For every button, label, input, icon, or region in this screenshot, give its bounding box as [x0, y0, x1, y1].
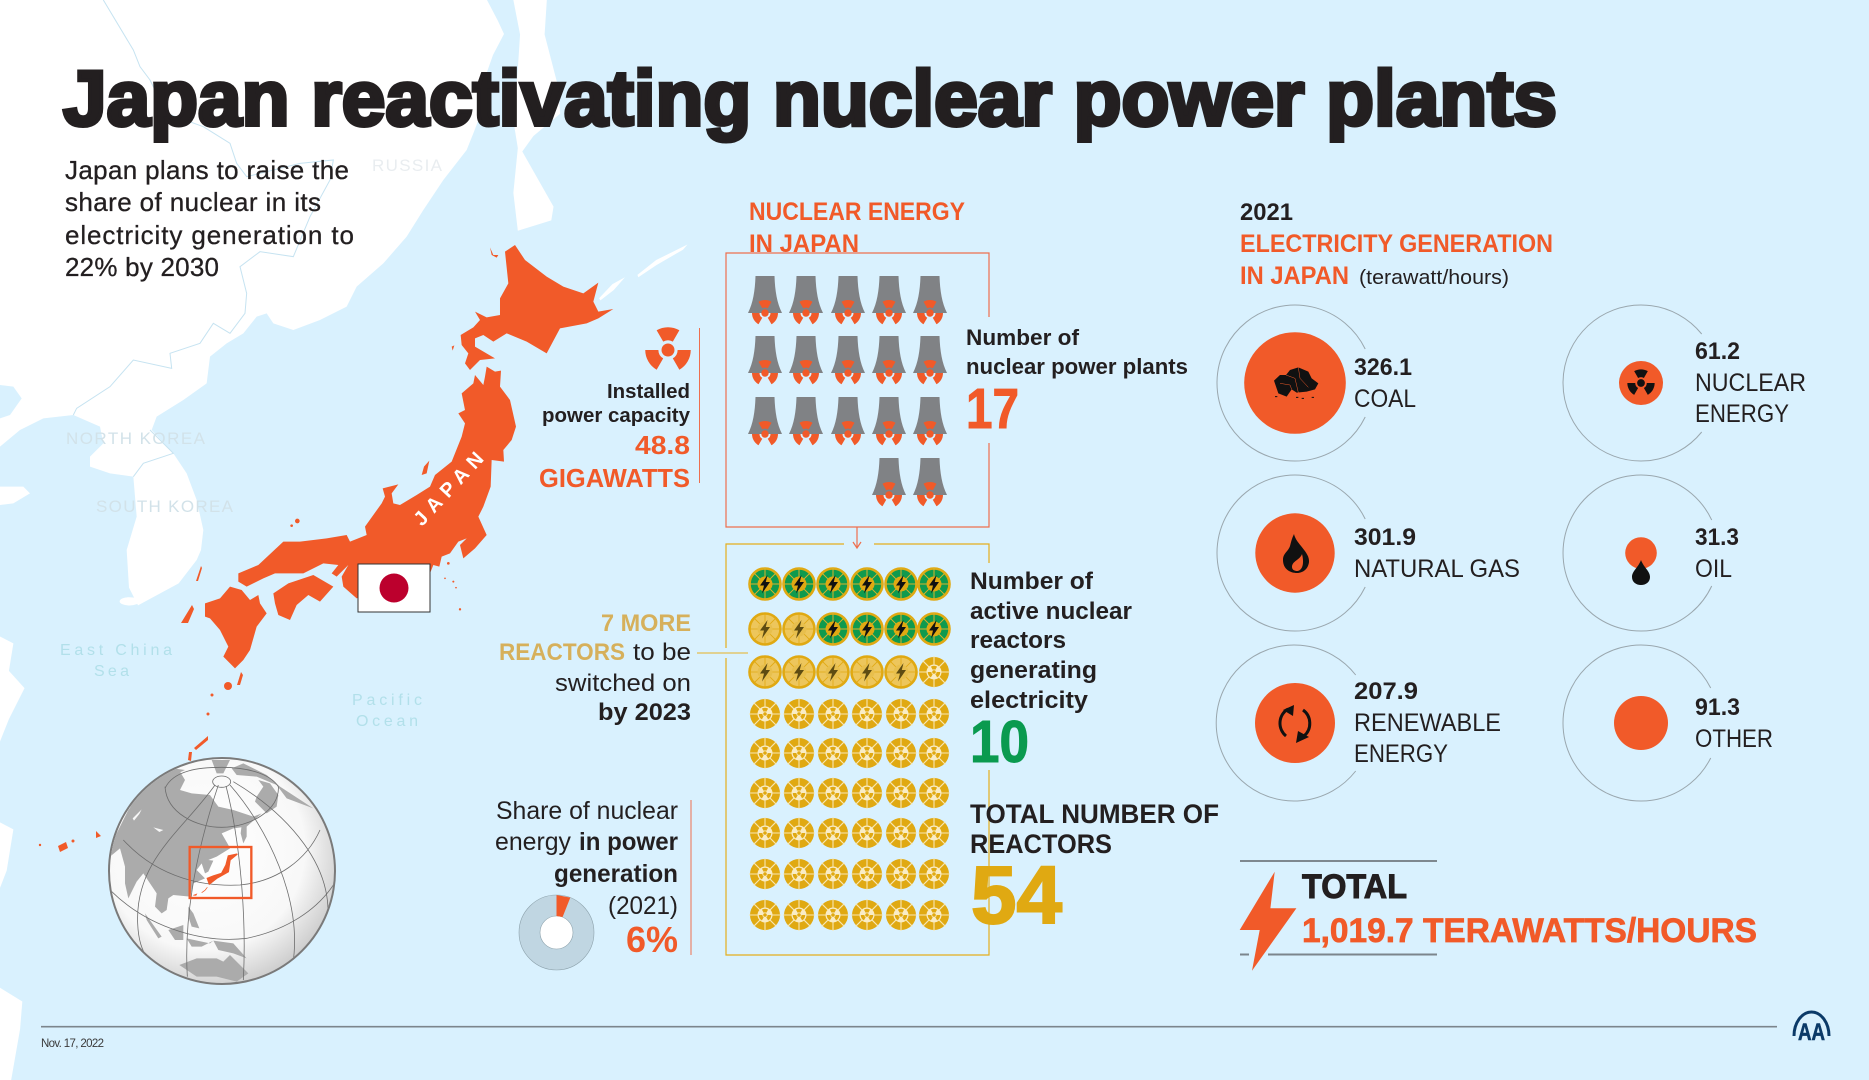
map: Japan	[39, 245, 613, 852]
callout: 7 more reactors	[499, 610, 748, 726]
icon: lightning bolt	[1240, 872, 1296, 971]
callout: 7 more reactors: REACTORS	[499, 639, 625, 666]
item: other: OTHER	[1695, 725, 1773, 753]
heading: electricity generation	[1240, 199, 1553, 290]
arrow	[853, 527, 861, 548]
text: active reactors: Number of	[970, 568, 1094, 595]
intro text	[65, 155, 354, 282]
icon: radiation	[1626, 369, 1656, 396]
map labels: Pacific	[352, 692, 422, 709]
callout: 7 more reactors: to be	[633, 639, 691, 666]
title: Japan reactivating nuclear power plants	[63, 54, 1557, 142]
map label: JAPAN: JAPAN	[410, 448, 488, 530]
item: other: 91.3	[1695, 694, 1740, 721]
item: nuclear energy: NUCLEAR	[1695, 369, 1806, 397]
item: nuclear energy	[1563, 305, 1806, 461]
icon: coal	[1274, 367, 1318, 398]
item: coal: 326.1	[1354, 354, 1412, 381]
callout: 7 more reactors: 7 MORE	[601, 610, 691, 637]
panel: nuclear energy heading: NUCLEAR ENERGY	[749, 198, 965, 226]
item: nuclear energy: ENERGY	[1695, 400, 1789, 428]
text: total reactors	[970, 799, 1219, 941]
map labels	[60, 156, 443, 730]
panel frame: power plants	[726, 253, 989, 527]
intro text: Japan plans to raise the	[65, 155, 349, 185]
map labels: RUSSIA	[372, 156, 443, 175]
text: active reactors: 10	[970, 709, 1029, 775]
text: total reactors: REACTORS	[970, 829, 1112, 859]
intro text: share of nuclear in its	[65, 187, 321, 217]
text: number of nuclear power plants	[966, 325, 1188, 441]
logo: AA: AA	[1798, 1019, 1825, 1046]
intro text: 22% by 2030	[65, 252, 219, 282]
chart: cooling towers	[748, 276, 947, 507]
icon: flag of Japan	[358, 564, 430, 612]
map labels: Sea	[94, 663, 129, 680]
globe locator	[108, 758, 335, 984]
text: share of nuclear energy: (2021)	[608, 892, 678, 920]
map labels: SOUTH KOREA	[96, 497, 234, 516]
total block	[1240, 861, 1757, 971]
item: natural gas: 301.9	[1354, 524, 1416, 551]
text: total reactors: 54	[971, 850, 1062, 941]
icon: oil drop	[1632, 560, 1650, 585]
heading: electricity generation: ELECTRICITY GENERATION	[1240, 230, 1553, 258]
text: installed capacity	[539, 327, 700, 493]
callout: 7 more reactors: by 2023	[598, 699, 691, 726]
text: active reactors: active nuclear	[970, 598, 1132, 625]
item: oil	[1563, 475, 1739, 631]
chart: nuclear share donut	[519, 895, 594, 970]
text: installed capacity: Installed	[607, 381, 690, 403]
item: renewable energy	[1216, 645, 1501, 801]
logo: AA	[1794, 1012, 1829, 1046]
item: renewable energy: 207.9	[1354, 678, 1418, 705]
map labels: NORTH KOREA	[66, 429, 206, 448]
icon: recycle arrows	[1280, 705, 1310, 743]
item: nuclear energy: 61.2	[1695, 338, 1740, 365]
text: share of nuclear energy: 6%	[626, 919, 678, 960]
text: active reactors	[970, 568, 1132, 775]
panel: nuclear energy heading	[749, 198, 965, 258]
icon: radiation symbol	[643, 327, 693, 371]
map labels: East China	[60, 642, 172, 659]
footer rule	[41, 1026, 1777, 1028]
item: natural gas: NATURAL GAS	[1354, 555, 1520, 583]
heading: electricity generation: 2021	[1240, 199, 1293, 226]
total block: TOTAL	[1302, 868, 1407, 906]
item: oil: 31.3	[1695, 524, 1739, 551]
footer date: Nov. 17, 2022	[41, 1038, 104, 1050]
text: share of nuclear energy: generation	[554, 860, 678, 888]
text: installed capacity: power capacity	[542, 405, 691, 427]
intro text: electricity generation to	[65, 220, 354, 250]
heading: electricity generation: IN JAPAN	[1240, 262, 1349, 290]
map: surrounding land	[0, 0, 687, 1080]
text: active reactors: generating	[970, 657, 1097, 684]
text: number of nuclear power plants: 17	[966, 377, 1019, 441]
chart: reactor pictogram grid	[749, 568, 950, 931]
total block: 1,019.7 TERAWATTS/HOURS	[1302, 912, 1757, 950]
text: total reactors: TOTAL NUMBER OF	[970, 799, 1219, 829]
text: active reactors: electricity	[970, 687, 1089, 714]
map labels: Ocean	[356, 713, 418, 730]
text: number of nuclear power plants: nuclear power plants	[966, 354, 1188, 379]
item: renewable energy: RENEWABLE	[1354, 709, 1501, 737]
text: active reactors: reactors	[970, 627, 1066, 654]
text: installed capacity: 48.8	[635, 430, 690, 460]
item: natural gas	[1217, 475, 1520, 631]
item: renewable energy: ENERGY	[1354, 740, 1448, 768]
text: installed capacity: GIGAWATTS	[539, 463, 690, 493]
heading: electricity generation: (terawatt/hours)	[1359, 267, 1509, 289]
item: coal	[1217, 305, 1416, 461]
panel: nuclear energy heading: IN JAPAN	[749, 230, 859, 258]
icon: flame	[1283, 534, 1309, 573]
callout: 7 more reactors: switched on	[555, 670, 691, 697]
text: share of nuclear energy: energy	[495, 828, 571, 856]
item: coal: COAL	[1354, 385, 1416, 413]
panel frame: reactors	[726, 544, 989, 955]
item: oil: OIL	[1695, 555, 1732, 583]
text: share of nuclear energy: in power	[579, 828, 678, 856]
text: number of nuclear power plants: Number of	[966, 325, 1080, 350]
text: share of nuclear energy: Share of nuclear	[496, 797, 678, 825]
text: share of nuclear energy	[495, 797, 691, 960]
item: other	[1563, 645, 1773, 801]
